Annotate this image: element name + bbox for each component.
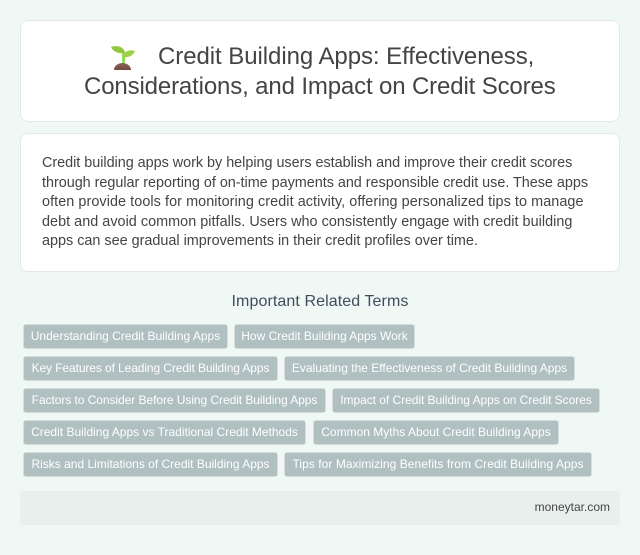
- tag: [23, 452, 278, 477]
- tag list: [23, 324, 600, 477]
- tag: Understanding Credit Building Apps: [31, 329, 220, 343]
- tag: How Credit Building Apps Work: [241, 329, 408, 343]
- source: moneytar.com: [535, 500, 610, 514]
- description text: apps can see gradual improvements in their credit profiles over time.: [42, 233, 478, 249]
- icon: seedling: [111, 46, 135, 70]
- tag: [332, 388, 600, 413]
- heading: important related terms: Important Related Terms: [232, 293, 408, 310]
- tag: [23, 356, 278, 381]
- tag: [284, 452, 592, 477]
- tag: Evaluating the Effectiveness of Credit Building Apps: [292, 361, 567, 375]
- tag: [23, 388, 326, 413]
- tag: [284, 356, 575, 381]
- tag: [23, 420, 306, 445]
- description text: through regular reporting of on-time payments and responsible credit use. These apps: [42, 175, 588, 191]
- tag: Credit Building Apps vs Traditional Credit Methods: [31, 425, 298, 439]
- description text: [42, 155, 588, 249]
- title: [84, 43, 556, 100]
- tag: [313, 420, 559, 445]
- tag: Key Features of Leading Credit Building Apps: [32, 361, 269, 375]
- title: Credit Building Apps: Effectiveness,: [158, 43, 534, 70]
- tag: Factors to Consider Before Using Credit Building Apps: [32, 393, 317, 407]
- panel: description: [20, 133, 620, 272]
- tag: Risks and Limitations of Credit Building Apps: [31, 457, 270, 471]
- tag: Tips for Maximizing Benefits from Credit Building Apps: [292, 457, 584, 471]
- tag: [234, 324, 415, 349]
- description text: often provide tools for monitoring credit activity, offering personalized tips to manage: [42, 194, 584, 210]
- tag: [23, 324, 228, 349]
- description text: Credit building apps work by helping users establish and improve their credit scores: [42, 155, 572, 171]
- tag: Impact of Credit Building Apps on Credit Scores: [340, 393, 592, 407]
- footer: [20, 491, 620, 525]
- tag: Common Myths About Credit Building Apps: [321, 425, 551, 439]
- panel: title card: [20, 20, 620, 122]
- title: Considerations, and Impact on Credit Scores: [84, 73, 556, 100]
- description text: debt and avoid common pitfalls. Users who consistently engage with credit building: [42, 214, 572, 230]
